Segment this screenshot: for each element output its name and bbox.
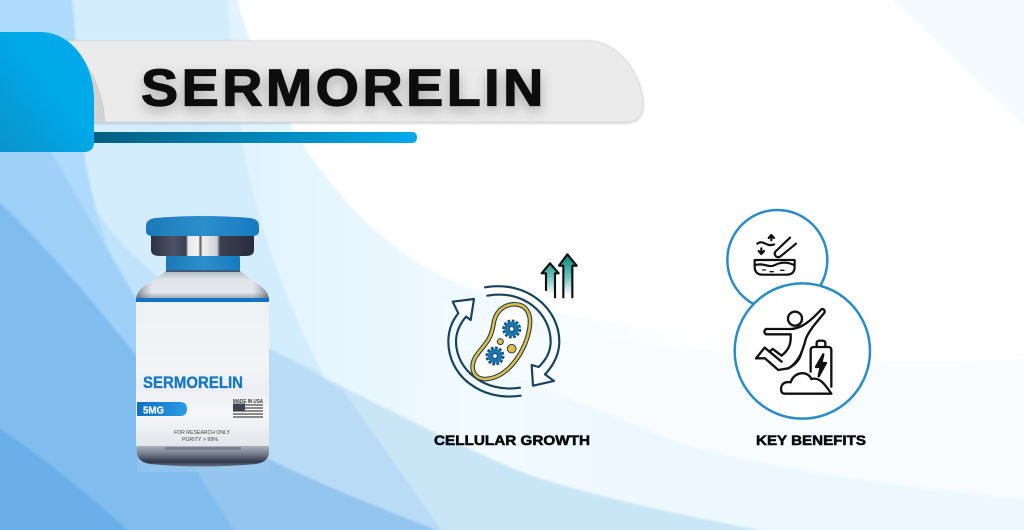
vial product name: SERMORELIN <box>143 373 243 392</box>
dose text: 5MG <box>143 404 164 416</box>
title: SERMORELIN <box>141 59 543 117</box>
banner ribbon <box>50 41 643 122</box>
vial reflection <box>137 458 269 472</box>
gear upper <box>504 321 520 337</box>
glass body <box>136 270 269 302</box>
cell dot small <box>497 339 503 345</box>
title accent bar <box>90 132 417 143</box>
label top stripe <box>136 298 269 302</box>
icon: key benefits <box>727 210 870 419</box>
icon: cell <box>473 304 530 379</box>
glass edge shading <box>136 270 269 302</box>
gear lower <box>487 348 503 364</box>
blue title tab <box>0 32 94 152</box>
small circle <box>727 210 827 310</box>
icon: skin treatment <box>755 235 796 275</box>
base highlight <box>165 447 241 450</box>
icon: cloud <box>781 373 831 394</box>
made in usa: MADE IN USA <box>233 399 263 405</box>
cap dark ring <box>151 232 254 256</box>
dose pill <box>137 402 187 416</box>
title tab shadow <box>60 41 105 122</box>
counter-clockwise arrow <box>448 299 521 397</box>
vial base <box>137 444 269 466</box>
title banner <box>0 32 643 152</box>
large circle <box>735 283 870 419</box>
icon: upward arrows <box>542 254 577 297</box>
flag <box>233 404 263 418</box>
neck lower shadow <box>166 270 240 272</box>
purity note: PURITY > 99% <box>182 437 218 443</box>
cell dot large <box>507 344 516 353</box>
label: cellular growth: CELLULAR GROWTH <box>434 432 590 448</box>
label <box>136 300 269 446</box>
icon: cellular growth <box>448 254 577 397</box>
blue cap <box>146 216 259 236</box>
clockwise arrow <box>485 286 559 386</box>
vial neck blue band <box>166 252 240 272</box>
research note: FOR RESEARCH ONLY <box>174 430 230 436</box>
label: key benefits: KEY BENEFITS <box>756 432 866 448</box>
product vial <box>136 216 269 472</box>
icon: battery <box>811 341 831 387</box>
icon: jumping person <box>756 309 825 370</box>
